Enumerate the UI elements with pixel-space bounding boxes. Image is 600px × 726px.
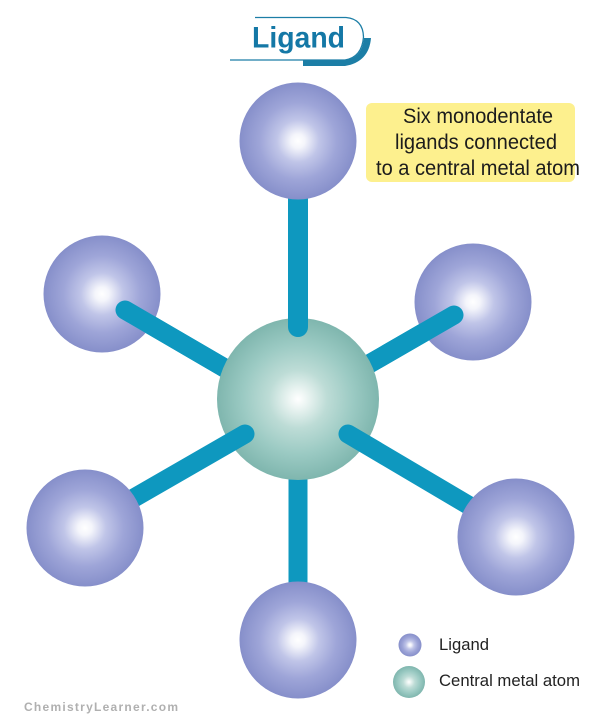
ligand: bottom bbox=[240, 582, 356, 698]
ligand: upper right bbox=[414, 244, 532, 360]
legend icon: ligand bbox=[398, 634, 422, 656]
central metal atom bbox=[217, 318, 379, 480]
legend label: central metal atom: Central metal atom bbox=[439, 671, 580, 690]
title banner swoosh bbox=[230, 18, 371, 66]
callout text: to a central metal atom bbox=[376, 157, 580, 180]
callout text: ligands connected bbox=[395, 131, 557, 154]
legend icon: central metal atom bbox=[393, 666, 425, 698]
ligand: upper left bbox=[44, 236, 160, 352]
callout box bbox=[366, 103, 575, 182]
ligand: lower right bbox=[458, 478, 574, 596]
legend bbox=[393, 634, 580, 698]
bond: upper left, over ligand bbox=[125, 310, 240, 377]
title: Ligand bbox=[230, 18, 371, 66]
bond: bottom bbox=[288, 470, 308, 600]
callout text: Six monodentate bbox=[403, 105, 553, 128]
watermark: ChemistryLearner.com bbox=[24, 700, 178, 714]
title text: Ligand bbox=[252, 22, 345, 54]
bond: upper right, over ligand bbox=[350, 315, 454, 375]
bond: lower right bbox=[348, 434, 480, 512]
bond: top bbox=[288, 190, 308, 327]
ligand: top bbox=[240, 82, 356, 200]
bond: upper left bbox=[125, 310, 240, 377]
bond: lower left bbox=[120, 434, 245, 506]
legend label: ligand: Ligand bbox=[439, 635, 489, 654]
bond: upper right bbox=[350, 315, 454, 375]
callout bbox=[366, 103, 580, 182]
ligand: lower left bbox=[26, 470, 144, 586]
